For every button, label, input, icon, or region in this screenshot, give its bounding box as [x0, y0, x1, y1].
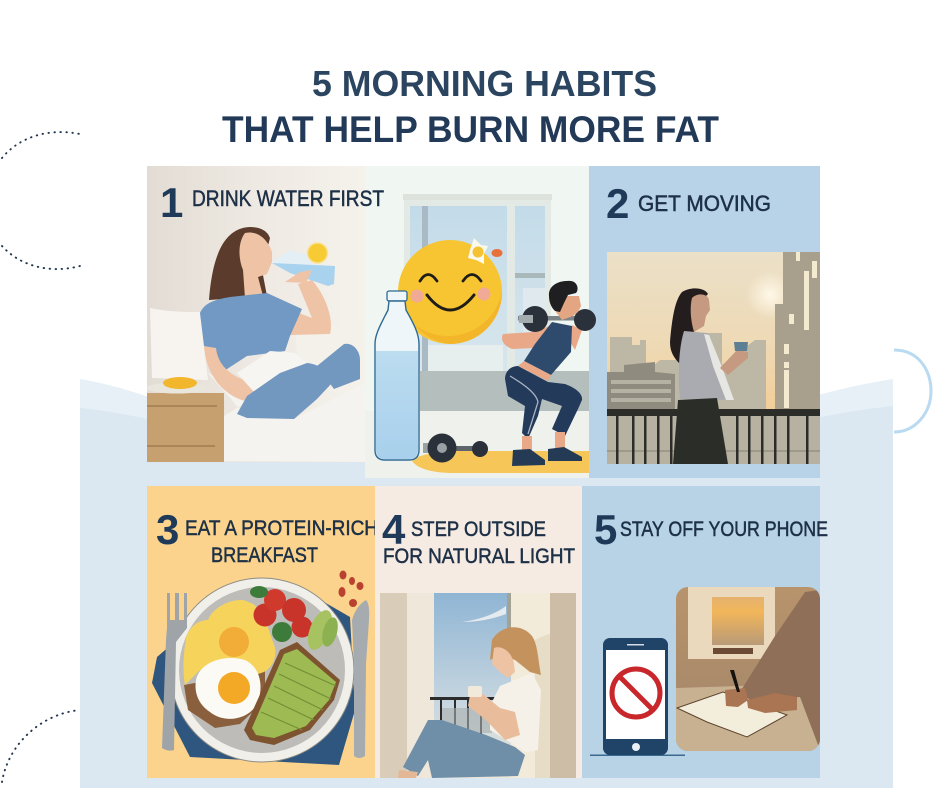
decorative dotted arc middle left [2, 246, 80, 269]
napkin [152, 602, 355, 765]
man squatting with barbell [502, 281, 596, 466]
panel 3 number and heading: 3 [156, 506, 179, 553]
balcony lower wall [607, 414, 820, 464]
panel 3 background [147, 486, 375, 778]
woman sitting with cup [398, 627, 541, 778]
panel 4 number and heading: FOR NATURAL LIGHT [383, 545, 575, 568]
panel 5 number and heading: 5 [594, 506, 617, 553]
panel 4 number and heading: STEP OUTSIDE [411, 518, 546, 541]
pen [730, 670, 740, 692]
man barbell [518, 306, 596, 332]
panel 5 number and heading [594, 506, 828, 553]
man shins [522, 436, 532, 452]
panel: center illustration [365, 166, 596, 478]
man shoes [512, 449, 545, 466]
title: THAT HELP BURN MORE FAT [222, 109, 719, 150]
distant skyline [607, 333, 766, 410]
railing [607, 409, 820, 464]
window [688, 587, 775, 659]
railing [430, 697, 500, 734]
woman drinking water [200, 227, 360, 419]
panel 5 background [582, 486, 820, 778]
right wall and column [507, 593, 511, 628]
balcony city scene [607, 252, 820, 464]
panel 3 number and heading [156, 506, 378, 567]
panel 4: step outside for natural light [375, 486, 582, 778]
panel 1 number and heading: DRINK WATER FIRST [192, 186, 384, 211]
panel 3 number and heading: EAT A PROTEIN-RICH [185, 517, 378, 540]
notebook [677, 692, 787, 737]
panel 2 number and heading [606, 180, 771, 227]
tomatoes [254, 604, 276, 626]
woman with mug [670, 288, 748, 464]
man tank top [524, 322, 572, 375]
tower right [775, 252, 820, 410]
panel 3: eat a protein-rich breakfast [147, 486, 378, 778]
raised arm [290, 280, 331, 335]
cucumber [303, 607, 337, 653]
bed and pillows [150, 308, 310, 461]
sweater [740, 590, 820, 750]
panel 3 number and heading: BREAKFAST [211, 544, 318, 567]
panel 5: stay off your phone [582, 486, 828, 778]
window [365, 194, 589, 478]
title: 5 MORNING HABITS [312, 63, 657, 104]
man arms [502, 325, 552, 349]
nightstand with lemon plate [147, 377, 224, 462]
water bottle with lemon [272, 243, 335, 286]
left curtains [380, 593, 407, 778]
toast under eggs [184, 670, 265, 728]
man leggings [505, 366, 582, 439]
hair [209, 227, 270, 300]
panel 2 background [589, 166, 820, 478]
avocado toast [244, 642, 340, 745]
desk journaling scene [676, 587, 820, 751]
panel 4 number and heading: 4 [382, 506, 406, 553]
balcony scene [380, 593, 576, 778]
face and neck [239, 232, 272, 298]
panel 4 background [375, 486, 582, 778]
lower arm [204, 346, 254, 401]
panel 1 photo [147, 166, 365, 462]
man midriff [518, 361, 551, 381]
shirt [200, 293, 302, 371]
panel 2 number and heading: 2 [606, 180, 629, 227]
title [222, 63, 719, 150]
near building left [607, 362, 675, 410]
red seeds [338, 570, 364, 607]
smiley emoji [398, 238, 502, 344]
center panel background [365, 166, 589, 478]
phone with no symbol [590, 638, 685, 756]
scrambled eggs [183, 600, 275, 685]
floor dumbbell [423, 434, 488, 462]
decorative blue ring right [894, 350, 931, 432]
man head [553, 296, 581, 320]
knife [352, 600, 369, 758]
fried egg [196, 658, 261, 719]
herbs [250, 586, 268, 598]
panel 1 wall background [147, 166, 365, 462]
decorative dotted arc top left [2, 132, 80, 158]
yellow floor mat [412, 451, 589, 473]
blanket [237, 351, 298, 392]
panel 4 number and heading [382, 506, 575, 568]
soft blue wave background [80, 379, 893, 788]
plate with eggs and avocado toast [170, 578, 354, 762]
panel 1 number and heading: 1 [160, 179, 183, 226]
panel 1 number and heading [160, 179, 384, 226]
panel 2: get moving [589, 166, 820, 478]
water bottle [375, 291, 419, 460]
panel 2 number and heading: GET MOVING [638, 191, 771, 216]
table [676, 684, 820, 751]
sun glow [750, 276, 783, 314]
fork [162, 593, 187, 751]
panel 1: drink water first [147, 166, 384, 462]
panel 5 number and heading: STAY OFF YOUR PHONE [620, 518, 828, 541]
decorative dotted arc bottom left [2, 710, 80, 782]
jeans [317, 344, 360, 389]
hands [725, 688, 748, 707]
